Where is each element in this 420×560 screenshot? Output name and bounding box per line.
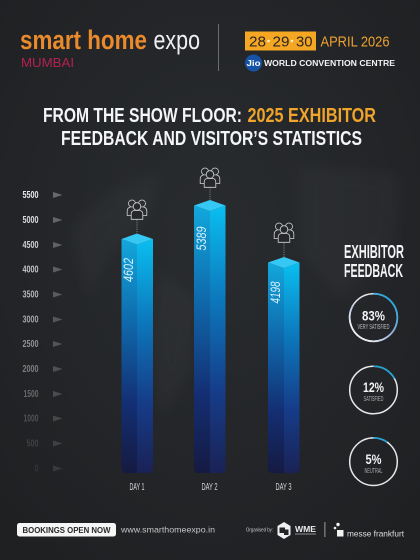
website: www.smarthomeexpo.in [120,524,215,534]
bar: day 2: 5389 [193,226,209,250]
brand logo: smart home expo Mumbai: expo [154,25,200,55]
ring: 5% neutral: 5% [366,452,382,467]
x axis labels: DAY 1 [130,482,145,493]
event dates: 28 [249,34,266,50]
bar: day 2 [193,168,226,473]
ring: 5% neutral: NEUTRAL [364,468,383,475]
venue: Jio World Convention Centre: Jio [246,59,261,68]
ring: 83% very satisfied: VERY SATISFIED [358,324,390,331]
faint world map backdrop [70,165,400,420]
ring: 83% very satisfied [350,294,397,341]
event dates: 30 [296,34,312,50]
title [43,105,376,150]
brand logo: smart home expo Mumbai: MUMBAI [21,55,74,70]
title: 2025 EXHIBITOR [248,105,376,127]
bar: day 3 [267,223,300,473]
y axis: 500 [26,438,39,450]
ring: 12% satisfied: 12% [363,380,384,395]
y axis: 0 [34,462,39,474]
bar: day 1: 4602 [120,258,136,282]
event dates: APRIL 2026 [320,34,390,50]
ring: 5% neutral [350,438,397,486]
y axis: 1000 [24,412,39,424]
title: FROM THE SHOW FLOOR: [43,105,242,127]
logo: messe frankfurt [334,523,405,538]
icon: visitors day 2 [200,168,220,200]
y axis: 2000 [22,363,39,375]
y axis [22,189,62,474]
header divider [218,24,219,71]
y axis: 2500 [22,338,39,350]
y axis: 4500 [22,239,39,251]
x axis labels: DAY 2 [202,482,218,493]
brand logo: smart home expo Mumbai: smart home [20,25,147,55]
ring: 83% very satisfied: 83% [362,308,385,324]
event dates [245,32,390,50]
y axis: 3500 [22,288,39,300]
y axis: 1500 [24,388,39,400]
ring: 12% satisfied [350,366,397,414]
bookings button: BOOKINGS OPEN NOW [22,526,111,535]
y axis: 5500 [22,189,39,201]
bookings button [17,523,116,536]
y axis: 5000 [22,214,39,226]
axis arrows [53,192,62,472]
venue: Jio World Convention Centre: WORLD CONVENTION CENTRE [264,59,395,68]
brand logo: smart home expo Mumbai [20,25,200,70]
ring: 12% satisfied: SATISFIED [364,396,384,403]
y axis: 4000 [22,264,39,276]
venue: Jio World Convention Centre [245,54,395,72]
y axis: 3000 [22,314,39,326]
exhibitor feedback heading [344,242,404,281]
logo: WME [278,522,316,539]
x axis labels: DAY 3 [276,482,292,493]
x axis labels [130,482,292,493]
icon: visitors day 1 [127,200,147,233]
bar: day 1 [120,200,153,473]
organised by: Organised by: [246,528,273,534]
bar: day 3: 4198 [267,281,283,304]
logo divider [324,522,326,537]
logo: messe frankfurt: messe frankfurt [347,528,405,538]
icon: visitors day 3 [274,223,294,257]
logo: WME: WME [295,524,316,534]
event dates: 29 [272,34,290,50]
